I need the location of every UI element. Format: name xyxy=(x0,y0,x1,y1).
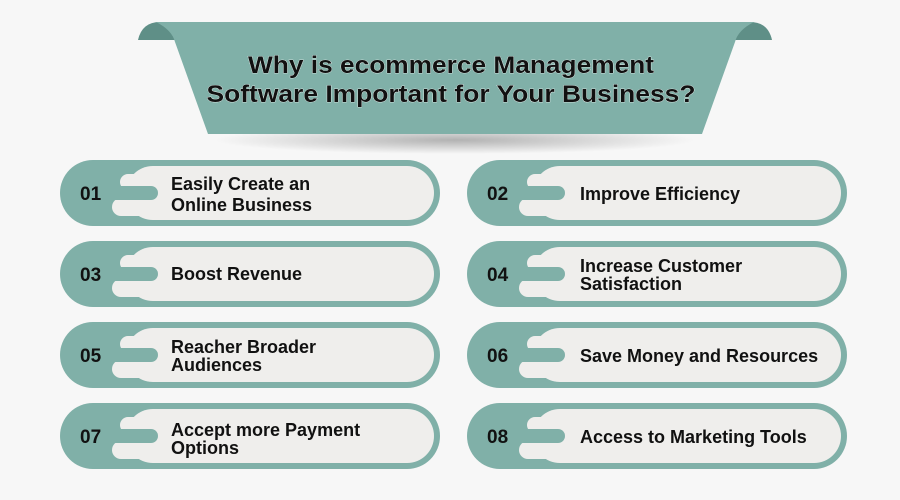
card 06 xyxy=(467,322,847,388)
card 03: Boost Revenue xyxy=(171,264,302,284)
card 02: 02 xyxy=(487,184,508,205)
card 08 xyxy=(467,403,847,469)
card 03: 03 xyxy=(80,265,101,286)
card 06: 06 xyxy=(487,346,508,367)
card 05: Audiences xyxy=(171,355,262,375)
card 02: Improve Efficiency xyxy=(580,184,740,204)
card 04: Satisfaction xyxy=(580,274,682,294)
card 03 xyxy=(60,241,440,307)
card 07: Accept more Payment xyxy=(171,420,360,440)
card 01 xyxy=(60,160,440,226)
card 05: 05 xyxy=(80,346,102,367)
title banner: Software Important for Your Business? xyxy=(206,81,696,108)
card 04: Increase Customer xyxy=(580,256,742,276)
card 07: 07 xyxy=(80,427,101,448)
card 05 xyxy=(60,322,440,388)
card 08: Access to Marketing Tools xyxy=(580,427,807,447)
card 07: Options xyxy=(171,438,239,458)
title text: Why is ecommerce Management xyxy=(248,52,654,79)
card 08: 08 xyxy=(487,427,508,448)
card 04: 04 xyxy=(487,265,509,286)
card 04 xyxy=(467,241,847,307)
card 01: Easily Create an xyxy=(171,174,310,194)
card 05: Reacher Broader xyxy=(171,337,316,357)
card 06: Save Money and Resources xyxy=(580,346,818,366)
card 02 xyxy=(467,160,847,226)
card 01: 01 xyxy=(80,184,102,205)
card 01: Online Business xyxy=(171,195,312,215)
card 07 xyxy=(60,403,440,469)
title banner xyxy=(138,22,772,154)
